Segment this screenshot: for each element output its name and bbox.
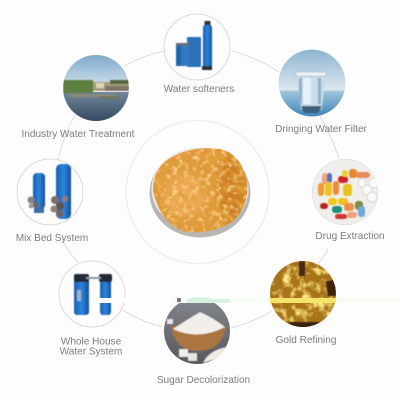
label: drug extraction: Drug Extraction [315, 231, 385, 242]
node: mix bed system [17, 159, 83, 225]
label: gold refining: Gold Refining [276, 335, 336, 346]
central ring [126, 120, 269, 264]
glitch band across lower image strip [97, 297, 400, 303]
node: whole house water system [59, 261, 125, 327]
label: sugar decolorization: Sugar Decolorization [157, 375, 250, 386]
label: mix bed system: Mix Bed System [16, 233, 88, 244]
label: whole house water system [60, 336, 122, 358]
connecting ring arcs [58, 51, 339, 328]
node: sugar decolorization [164, 303, 230, 366]
label: drinking water filter: Dringing Water Filter [275, 124, 368, 135]
node: drug extraction [312, 159, 379, 225]
node: industry water treatment [63, 55, 129, 122]
node: drinking water filter [278, 50, 346, 116]
icon: softener tanks [176, 21, 212, 70]
label: whole house water system: Whole House [61, 336, 122, 348]
node: gold refining [270, 261, 336, 328]
label: water softeners: Water softeners [164, 84, 234, 95]
icon: two filter housings [74, 274, 112, 315]
center image: resin dish [150, 145, 250, 238]
label: industry water treatment: Industry Water Treatment [22, 129, 135, 140]
label: whole house water system: Water System [60, 346, 122, 358]
node: water softeners [164, 14, 230, 80]
icon: mix bed tanks [28, 164, 71, 219]
